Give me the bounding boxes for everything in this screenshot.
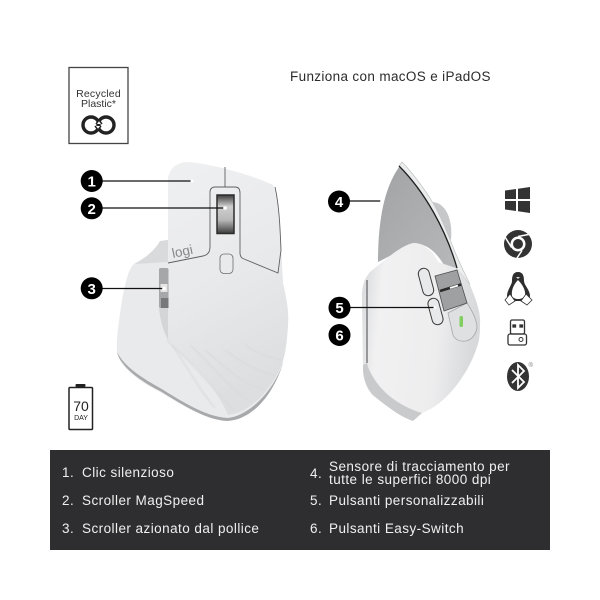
recycled plastic badge: Recycled bbox=[76, 88, 121, 100]
scroll wheel bbox=[435, 270, 467, 311]
icon: battery 70 day bbox=[69, 384, 92, 430]
lower side button bbox=[427, 297, 444, 326]
brand: logi: logi bbox=[171, 242, 194, 261]
callout 6: 6 bbox=[335, 328, 344, 344]
callout 1: 1 bbox=[88, 174, 96, 190]
callout 5 bbox=[328, 297, 436, 319]
scroll wheel bbox=[217, 195, 234, 234]
easy-switch panel bbox=[448, 303, 477, 341]
main shell bbox=[167, 162, 288, 415]
item 5: Pulsanti personalizzabili bbox=[329, 493, 484, 508]
callout 5: 5 bbox=[335, 300, 344, 317]
bottom rim bbox=[117, 352, 284, 421]
item 1: Clic silenzioso bbox=[82, 465, 174, 480]
callout 3: 3 bbox=[88, 281, 96, 298]
thumb scroller bbox=[159, 268, 168, 308]
callout 4 bbox=[328, 190, 384, 212]
icon: bluetooth bbox=[507, 362, 534, 391]
callout 6 bbox=[328, 324, 350, 346]
mode shift button bbox=[220, 254, 233, 274]
heading: compatibility: Funziona con macOS e iPadOS bbox=[290, 69, 491, 84]
icon: bluetooth: ® bbox=[528, 362, 534, 369]
icon: linux bbox=[505, 272, 532, 305]
button seams bbox=[168, 167, 281, 273]
thumb strip bbox=[159, 268, 168, 340]
shell body bbox=[362, 243, 480, 421]
black seam bbox=[399, 166, 457, 268]
item 3: Scroller azionato dal pollice bbox=[82, 521, 259, 536]
panel: feature list bbox=[50, 450, 550, 550]
item 4: tutte le superfici 8000 dpi bbox=[329, 472, 491, 487]
recycled plastic badge: Plastic* bbox=[81, 98, 116, 110]
callout 2: 2 bbox=[88, 201, 96, 218]
item 4: Sensore di tracciamento per bbox=[329, 459, 510, 474]
mouse: side view bbox=[362, 162, 480, 421]
status light bbox=[460, 316, 463, 327]
thumb crescent bbox=[135, 240, 168, 264]
mouse: top view bbox=[117, 162, 288, 421]
callout 2 bbox=[81, 197, 227, 219]
item 1: 1. bbox=[62, 465, 74, 480]
callout 1 bbox=[81, 170, 194, 192]
item 6: 6. bbox=[310, 521, 322, 536]
callout 4: 4 bbox=[335, 194, 344, 211]
rib shading bbox=[167, 340, 282, 411]
icon: windows bbox=[505, 187, 530, 213]
item 2: 2. bbox=[62, 493, 74, 508]
item 4: 4. bbox=[310, 466, 322, 481]
item 6: Pulsanti Easy-Switch bbox=[329, 521, 464, 536]
thumb wheel bump bbox=[433, 202, 451, 240]
item 3: 3. bbox=[62, 521, 74, 536]
recycled plastic badge bbox=[69, 68, 128, 144]
sensor surface bbox=[378, 167, 457, 270]
item 5: 5. bbox=[310, 493, 322, 508]
top strip bbox=[399, 162, 470, 285]
item 2: Scroller MagSpeed bbox=[82, 493, 204, 508]
icon: battery 70 day: 70 bbox=[73, 398, 89, 414]
top side button bbox=[417, 267, 435, 297]
wing and thumb rest bbox=[117, 240, 283, 421]
icon: chrome bbox=[504, 230, 532, 258]
icon: battery 70 day: DAY bbox=[74, 415, 88, 422]
icon: usb receiver bbox=[508, 320, 526, 345]
lower rim bbox=[363, 363, 422, 421]
callout 3 bbox=[81, 277, 166, 299]
